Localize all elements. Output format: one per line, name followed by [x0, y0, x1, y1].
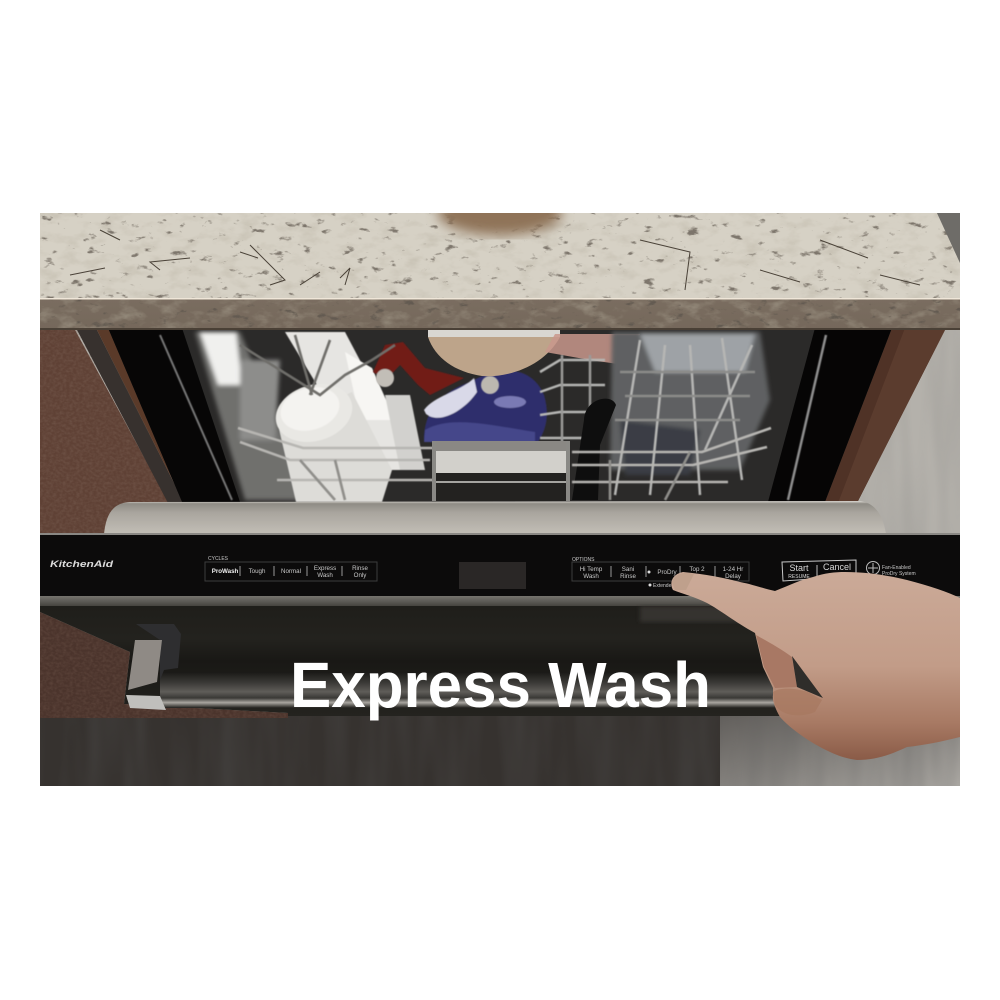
start and cancel: Start	[789, 563, 809, 573]
options group	[572, 557, 749, 589]
blue bowl	[424, 371, 547, 442]
right rack wires	[540, 338, 755, 495]
fan-enabled label	[866, 562, 916, 577]
options group: Hi Temp	[580, 566, 603, 573]
start and cancel: Cancel	[823, 562, 851, 572]
red item	[373, 342, 499, 395]
cycles group: Tough	[249, 568, 266, 575]
door lid	[104, 501, 886, 534]
glass on right	[610, 332, 770, 475]
display	[459, 562, 526, 589]
handle	[126, 624, 820, 710]
options group: Delay	[725, 573, 742, 580]
white dishes	[269, 332, 425, 502]
cycles group: Wash	[317, 572, 333, 579]
title: Express Wash	[290, 649, 711, 721]
options group: Top 2	[689, 566, 705, 573]
cycles group: Rinse	[352, 565, 368, 572]
cycles group: Express	[314, 565, 336, 572]
cycles group	[205, 556, 377, 581]
lower door	[40, 596, 960, 716]
options group: 1-24 Hr	[723, 566, 743, 573]
speckled bowl hanging under counter	[428, 337, 560, 376]
fan-enabled label: Fan-Enabled	[882, 565, 911, 571]
options group: Sani	[622, 566, 634, 573]
dishwasher interior	[100, 328, 900, 508]
cycles group: ProWash	[212, 568, 239, 575]
options group: OPTIONS	[572, 557, 595, 563]
rack wires	[238, 335, 771, 500]
options group: Extended	[653, 583, 674, 589]
options group: Wash	[583, 573, 599, 580]
rack handle tab	[432, 441, 570, 501]
control panel	[40, 533, 960, 596]
options group: Rinse	[620, 573, 636, 580]
wood cabinets	[40, 328, 946, 718]
countertop	[40, 213, 960, 330]
photo: dishwasher scene	[40, 191, 960, 786]
options group: ProDry	[657, 569, 678, 576]
cycles group: Only	[354, 572, 367, 579]
cycles group: CYCLES	[208, 556, 229, 562]
back wall and floor	[40, 213, 960, 786]
cycles group: Normal	[281, 568, 301, 575]
start and cancel	[782, 560, 856, 581]
brand: KitchenAid	[50, 559, 113, 570]
striped cloth	[545, 334, 640, 365]
fan-enabled label: ProDry System	[882, 571, 916, 577]
tub walls	[108, 328, 892, 502]
dark spatula	[572, 399, 616, 500]
left rack clutter	[195, 332, 300, 500]
start and cancel: RESUME	[788, 574, 810, 580]
hand	[671, 572, 960, 760]
